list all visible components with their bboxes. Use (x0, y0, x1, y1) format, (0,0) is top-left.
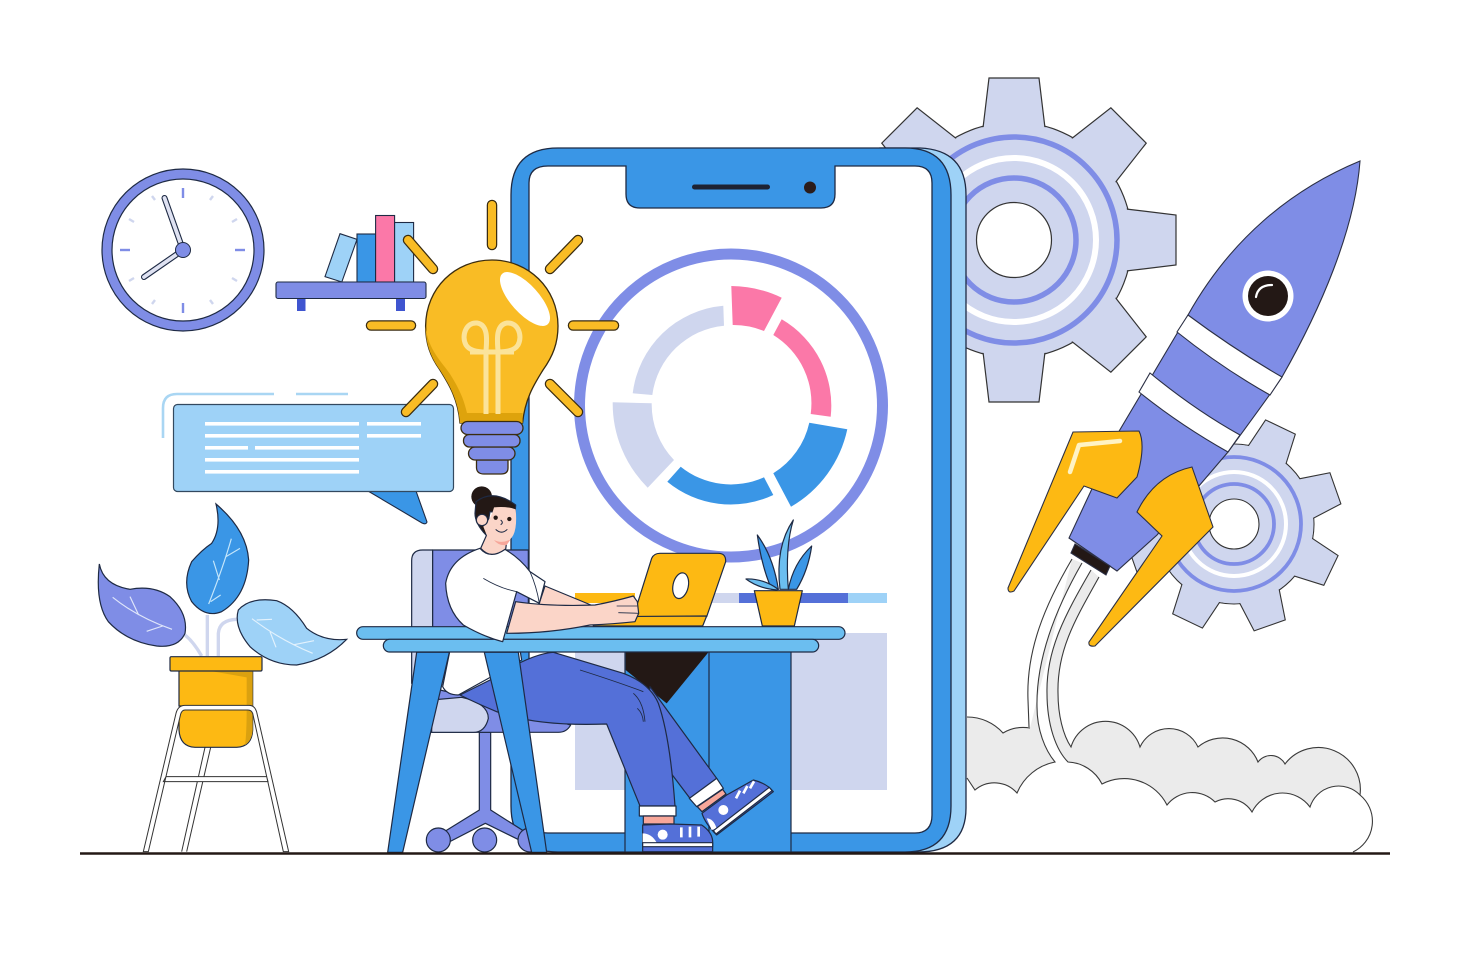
near leg (460, 652, 675, 806)
desk plant (746, 520, 812, 626)
shirt upper (446, 548, 545, 642)
phone (511, 148, 966, 852)
bulb highlight (492, 264, 558, 334)
desk and woman (357, 486, 845, 852)
head (471, 486, 516, 545)
progress bars (575, 593, 887, 603)
clock (102, 169, 264, 331)
blue stand under desk (625, 650, 791, 852)
bulb rays (371, 205, 614, 412)
bulb shadow (426, 326, 523, 423)
shirt lower (443, 650, 522, 695)
rocket window (1242, 270, 1294, 322)
phone speaker (692, 184, 770, 190)
chart panel (575, 633, 887, 790)
smoke clouds and exhaust (967, 559, 1372, 852)
office chair base (426, 732, 542, 852)
icon: small gear (1126, 416, 1342, 632)
rocket nozzle (1071, 544, 1110, 575)
shelf (276, 282, 426, 311)
near shoe (643, 824, 713, 852)
chair back (412, 550, 528, 683)
laptop (592, 553, 726, 626)
far shoe (702, 780, 773, 835)
rocket body (1069, 161, 1360, 571)
fin highlight (1070, 441, 1120, 472)
stool frame (143, 705, 289, 852)
desk right leg (484, 652, 547, 852)
potted plant on stool (98, 504, 347, 852)
leaf: light blue (237, 600, 347, 665)
desk top (357, 627, 845, 652)
gauge ring (580, 254, 882, 557)
chair seat (432, 690, 571, 732)
near arm and hand (507, 596, 639, 633)
far leg (643, 687, 717, 798)
rocket (1008, 161, 1360, 646)
bookshelf (276, 216, 426, 311)
stool back leg (182, 747, 211, 852)
plant pot (170, 657, 262, 747)
rocket left fin (1008, 431, 1142, 592)
desk left leg (388, 652, 449, 852)
speech bubble (163, 394, 454, 524)
neck (481, 533, 507, 555)
phone body (511, 148, 951, 852)
light bulb (371, 205, 614, 474)
icon: large gear (852, 78, 1176, 402)
plant stems (185, 615, 237, 656)
far sock (689, 778, 726, 812)
leaf: periwinkle (98, 564, 186, 646)
black under-desk shadow (626, 652, 708, 703)
bulb glass (426, 260, 558, 423)
rocket stripes (1139, 315, 1282, 452)
ground line (80, 852, 1390, 855)
donut chart (613, 286, 847, 507)
leaf: blue (187, 504, 249, 614)
filament (464, 323, 520, 414)
rocket right fin (1089, 467, 1213, 646)
phone camera (804, 182, 816, 194)
near sock (639, 806, 676, 824)
phone screen (529, 166, 932, 833)
bulb base (461, 422, 523, 474)
books (325, 216, 414, 282)
far arm (538, 586, 593, 606)
phone back edge (880, 148, 966, 852)
